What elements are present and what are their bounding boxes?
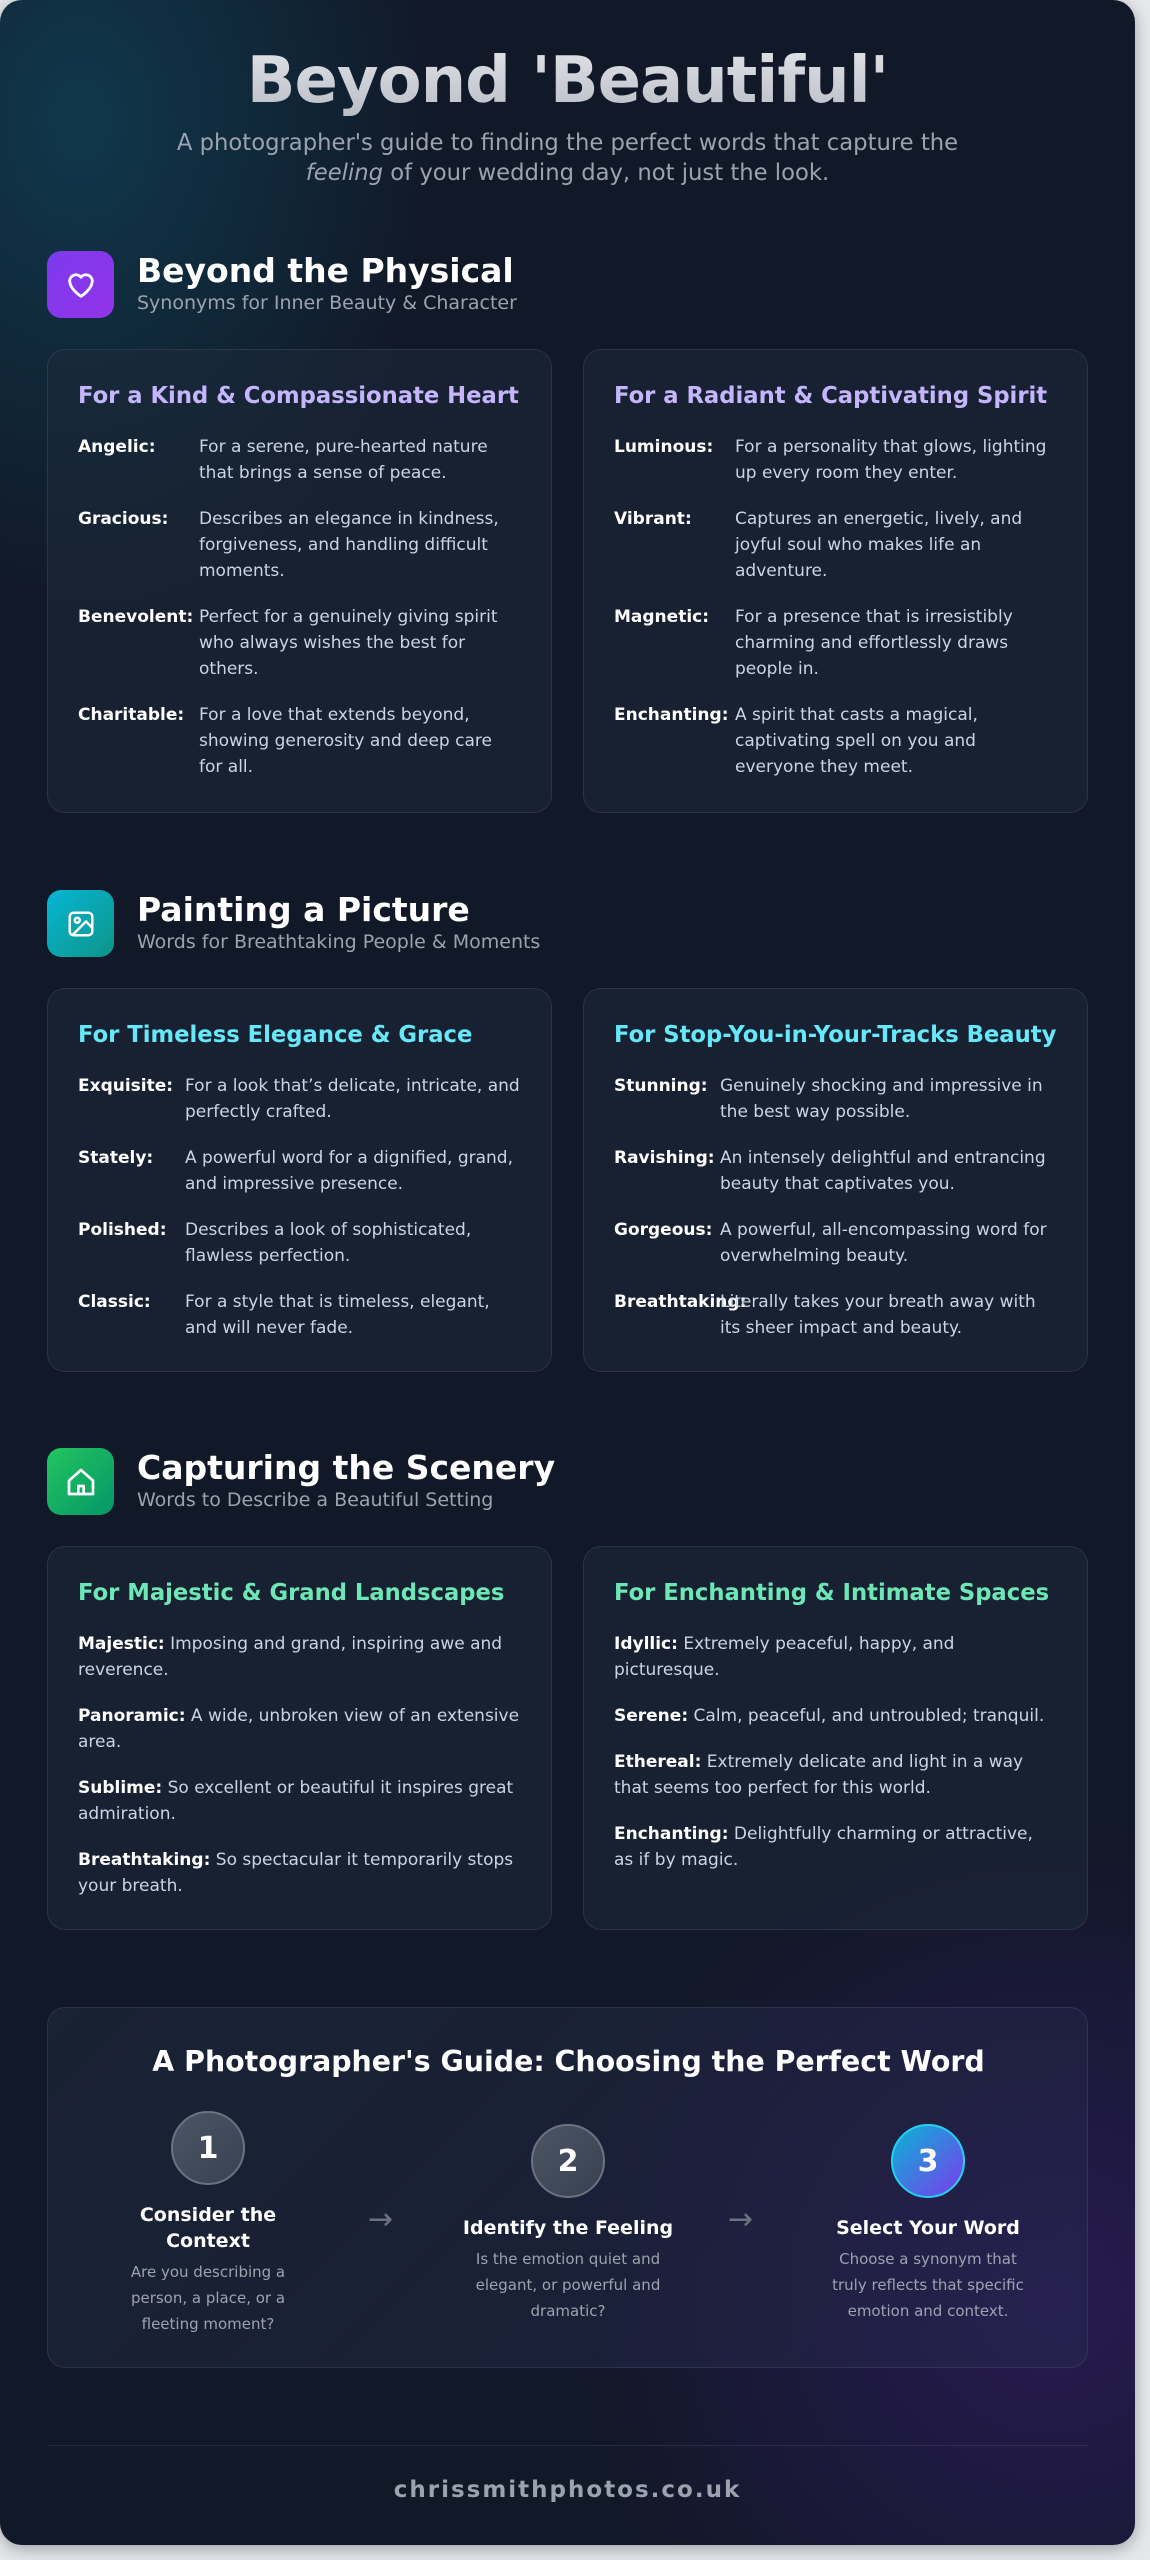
panel: kind heart: For a Kind & Compassionate Heart: [78, 383, 519, 409]
panel: radiant spirit: Magnetic:: [614, 607, 709, 627]
panel: stop-you-in-your-tracks: Breathtaking:: [614, 1292, 746, 1312]
panel: timeless elegance: [47, 988, 552, 1372]
panel: majestic landscapes: Majestic: Imposing and grand, inspiring awe and reverence.: [78, 1634, 502, 1680]
panel: majestic landscapes: Panoramic: A wide, unbroken view of an extensive area.: [78, 1706, 519, 1752]
panel: stop-you-in-your-tracks: Stunning:: [614, 1076, 708, 1096]
panel: kind heart: For a love that extends beyond, showing generosity and deep care for all.: [199, 705, 492, 777]
section header: Capturing the Scenery: Capturing the Scenery: [137, 1448, 555, 1487]
panel: majestic landscapes: For Majestic & Grand Landscapes: [78, 1580, 504, 1606]
icon: heart: [47, 251, 114, 318]
step 2: [463, 2124, 673, 2320]
step 1: [131, 2111, 285, 2333]
icon: picture: [47, 890, 114, 957]
panel: stop-you-in-your-tracks: Gorgeous:: [614, 1220, 712, 1240]
panel: radiant spirit: [583, 349, 1088, 813]
panel: radiant spirit: Vibrant:: [614, 509, 692, 529]
title: Beyond 'Beautiful': [247, 44, 888, 118]
section header: Beyond the Physical: Synonyms for Inner Beauty & Character: [137, 292, 517, 314]
step 2: Is the emotion quiet and elegant, or powerful and dramatic?: [476, 2250, 660, 2320]
panel: radiant spirit: Captures an energetic, lively, and joyful soul who makes life an adventure.: [735, 509, 1022, 581]
panel: timeless elegance: Polished:: [78, 1220, 167, 1240]
section header: Beyond the Physical: [47, 251, 517, 318]
guide heading: A Photographer's Guide: Choosing the Perfect Word: [152, 2045, 985, 2078]
panel: kind heart: [47, 349, 552, 813]
panel: radiant spirit: A spirit that casts a magical, captivating spell on you and everyone they meet.: [735, 705, 978, 777]
panel: intimate spaces: Serene: Calm, peaceful, and untroubled; tranquil.: [614, 1706, 1044, 1726]
panel: stop-you-in-your-tracks: Ravishing:: [614, 1148, 715, 1168]
panel: majestic landscapes: [47, 1546, 552, 1930]
step 3: 3: [918, 2144, 938, 2178]
panel: stop-you-in-your-tracks: [583, 988, 1088, 1372]
panel: kind heart: Angelic:: [78, 437, 156, 457]
section header: Painting a Picture: [47, 890, 540, 957]
step 3: Select Your Word: [836, 2217, 1020, 2239]
panel: timeless elegance: Classic:: [78, 1292, 151, 1312]
panel: intimate spaces: [583, 1546, 1088, 1930]
step 1: Are you describing a person, a place, or a fleeting moment?: [131, 2263, 285, 2333]
panel: stop-you-in-your-tracks: A powerful, all-encompassing word for overwhelming beauty.: [720, 1220, 1047, 1266]
panel: kind heart: Gracious:: [78, 509, 168, 529]
step 2: 2: [558, 2144, 578, 2178]
panel: majestic landscapes: Breathtaking: So spectacular it temporarily stops your breath.: [78, 1850, 513, 1896]
panel: kind heart: For a serene, pure-hearted nature that brings a sense of peace.: [199, 437, 488, 483]
panel: timeless elegance: Describes a look of sophisticated, flawless perfection.: [185, 1220, 471, 1266]
icon: house: [47, 1448, 114, 1515]
panel: stop-you-in-your-tracks: Literally takes your breath away with its sheer impact and beauty.: [720, 1292, 1036, 1338]
subtitle: feeling of your wedding day, not just the look.: [306, 160, 829, 186]
panel: stop-you-in-your-tracks: Genuinely shocking and impressive in the best way possible.: [720, 1076, 1043, 1122]
panel: intimate spaces: Enchanting: Delightfully charming or attractive, as if by magic.: [614, 1824, 1033, 1870]
step 1: Consider the Context: [140, 2204, 276, 2252]
panel: timeless elegance: For a style that is timeless, elegant, and will never fade.: [185, 1292, 490, 1338]
subtitle: A photographer's guide to finding the perfect words that capture the: [177, 130, 958, 156]
panel: stop-you-in-your-tracks: For Stop-You-in-Your-Tracks Beauty: [614, 1022, 1056, 1048]
title: [0, 38, 1135, 124]
panel: radiant spirit: For a personality that glows, lighting up every room they enter.: [735, 437, 1046, 483]
panel: kind heart: Charitable:: [78, 705, 184, 725]
panel: radiant spirit: For a Radiant & Captivating Spirit: [614, 383, 1047, 409]
panel: timeless elegance: Stately:: [78, 1148, 153, 1168]
panel: intimate spaces: For Enchanting & Intimate Spaces: [614, 1580, 1049, 1606]
panel: intimate spaces: Ethereal: Extremely delicate and light in a way that seems too perfect for this world.: [614, 1752, 1023, 1798]
step 3: Choose a synonym that truly reflects that specific emotion and context.: [832, 2250, 1024, 2320]
panel: intimate spaces: Idyllic: Extremely peaceful, happy, and picturesque.: [614, 1634, 954, 1680]
panel: timeless elegance: For Timeless Elegance & Grace: [78, 1022, 472, 1048]
panel: timeless elegance: Exquisite:: [78, 1076, 173, 1096]
footer: chrissmithphotos.co.uk: [394, 2477, 741, 2503]
step 2: Identify the Feeling: [463, 2217, 673, 2239]
panel: radiant spirit: Luminous:: [614, 437, 713, 457]
subtitle: [177, 130, 958, 186]
section header: Capturing the Scenery: Words to Describe a Beautiful Setting: [137, 1489, 493, 1511]
panel: majestic landscapes: Sublime: So excellent or beautiful it inspires great admiration.: [78, 1778, 513, 1824]
arrow: →: [728, 2202, 753, 2237]
section header: Capturing the Scenery: [47, 1448, 555, 1515]
section header: Beyond the Physical: Beyond the Physical: [137, 251, 514, 290]
panel: kind heart: Describes an elegance in kindness, forgiveness, and handling difficult moments.: [199, 509, 499, 581]
panel: radiant spirit: For a presence that is irresistibly charming and effortlessly draws people in.: [735, 607, 1013, 679]
panel: kind heart: Perfect for a genuinely giving spirit who always wishes the best for others.: [199, 607, 498, 679]
arrow: →: [368, 2202, 393, 2237]
panel: kind heart: Benevolent:: [78, 607, 193, 627]
panel: stop-you-in-your-tracks: An intensely delightful and entrancing beauty that captivates you.: [720, 1148, 1046, 1194]
section header: Painting a Picture: Words for Breathtaking People & Moments: [137, 931, 540, 953]
panel: radiant spirit: Enchanting:: [614, 705, 728, 725]
step 1: 1: [198, 2130, 218, 2166]
panel: timeless elegance: A powerful word for a dignified, grand, and impressive presence.: [185, 1148, 513, 1194]
panel: photographer's guide: [47, 2007, 1088, 2368]
step 3: [832, 2124, 1024, 2320]
section header: Painting a Picture: Painting a Picture: [137, 890, 470, 929]
panel: timeless elegance: For a look that’s delicate, intricate, and perfectly crafted.: [185, 1076, 520, 1122]
